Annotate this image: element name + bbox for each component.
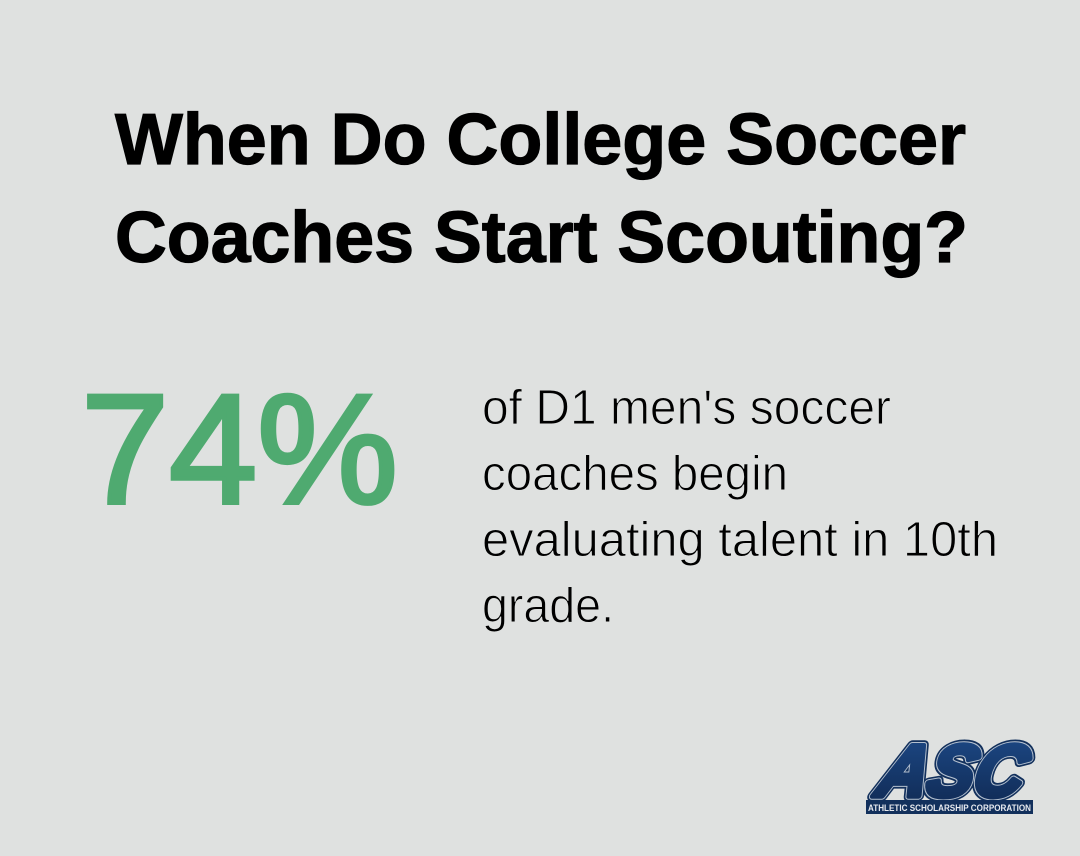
logo tagline: ATHLETIC SCHOLARSHIP CORPORATION [868,803,1031,814]
description text: grade. [482,579,614,633]
logo letters: ASC [868,730,1038,812]
title: Coaches Start Scouting? [115,198,968,278]
title: When Do College Soccer [115,100,966,180]
description text: coaches begin [482,447,788,501]
logo letters: ASC [868,730,1038,812]
statistic: 74%: 74% [81,363,398,537]
logo tagline [866,800,1033,814]
title [115,100,968,278]
description text: evaluating talent in 10th [482,513,998,567]
logo letters: ASC [868,730,1038,812]
logo: ASC Athletic Scholarship Corporation [866,730,1038,814]
description text [482,381,998,633]
description text: of D1 men's soccer [482,381,891,435]
